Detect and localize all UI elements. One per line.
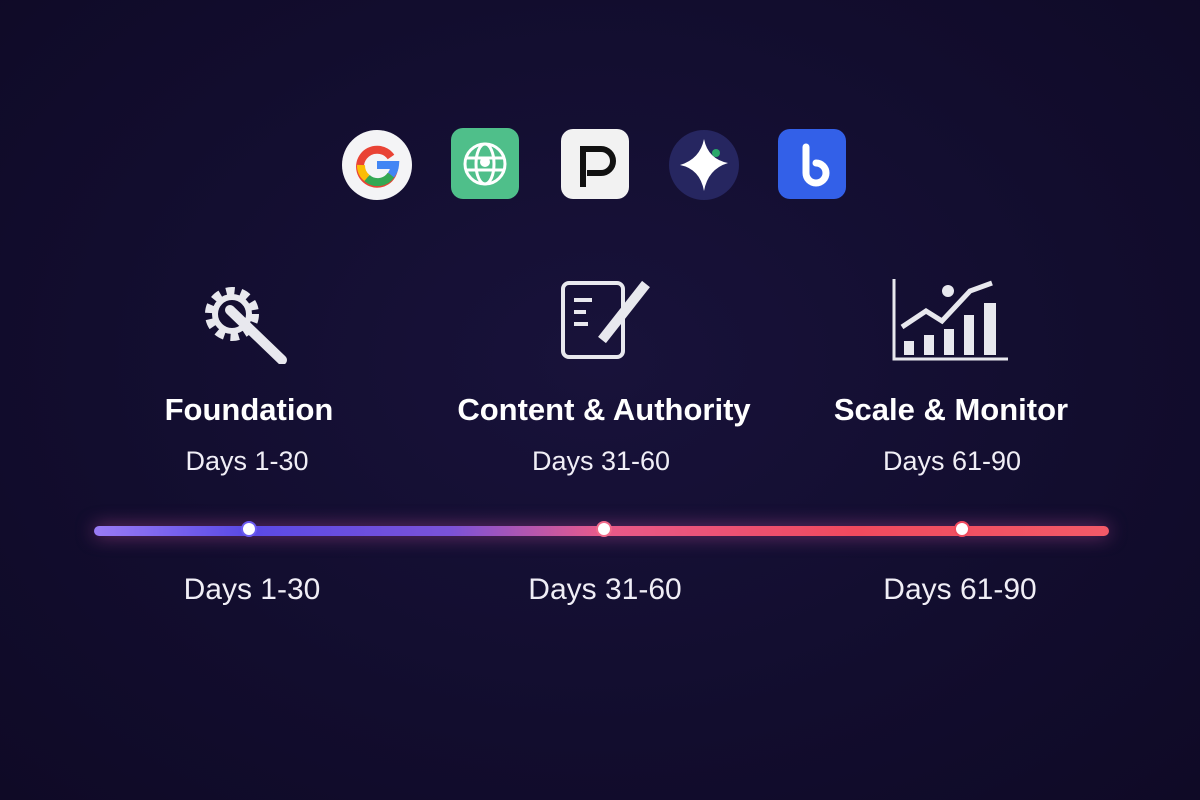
icon: bing b: [778, 129, 846, 199]
dot 1: [241, 521, 257, 537]
bottom label 1: Days 1-30: [184, 573, 320, 606]
bottom label 2: Days 31-60: [528, 573, 682, 606]
bottom label 3: Days 61-90: [883, 573, 1037, 606]
heading: Scale & Monitor: Scale & Monitor: [834, 392, 1068, 427]
timeline: [94, 526, 1109, 536]
subtitle 3: Days 61-90: [883, 446, 1021, 476]
icon: google: [342, 130, 412, 200]
subtitle 1: Days 1-30: [185, 446, 309, 476]
heading: Content & Authority: Content & Authority: [457, 392, 751, 427]
icon: chatgpt: [451, 128, 519, 199]
subtitle 2: Days 31-60: [532, 446, 670, 476]
icon: star ai: [669, 130, 739, 200]
icon: growth chart: [892, 279, 1008, 360]
logos row: [342, 128, 846, 200]
icon: gear wrench: [205, 287, 287, 364]
dot 3: [954, 521, 970, 537]
icon: perplexity: [561, 129, 629, 199]
icon: document pen: [561, 280, 650, 359]
dot 2: [596, 521, 612, 537]
heading: Foundation: Foundation: [165, 392, 333, 427]
